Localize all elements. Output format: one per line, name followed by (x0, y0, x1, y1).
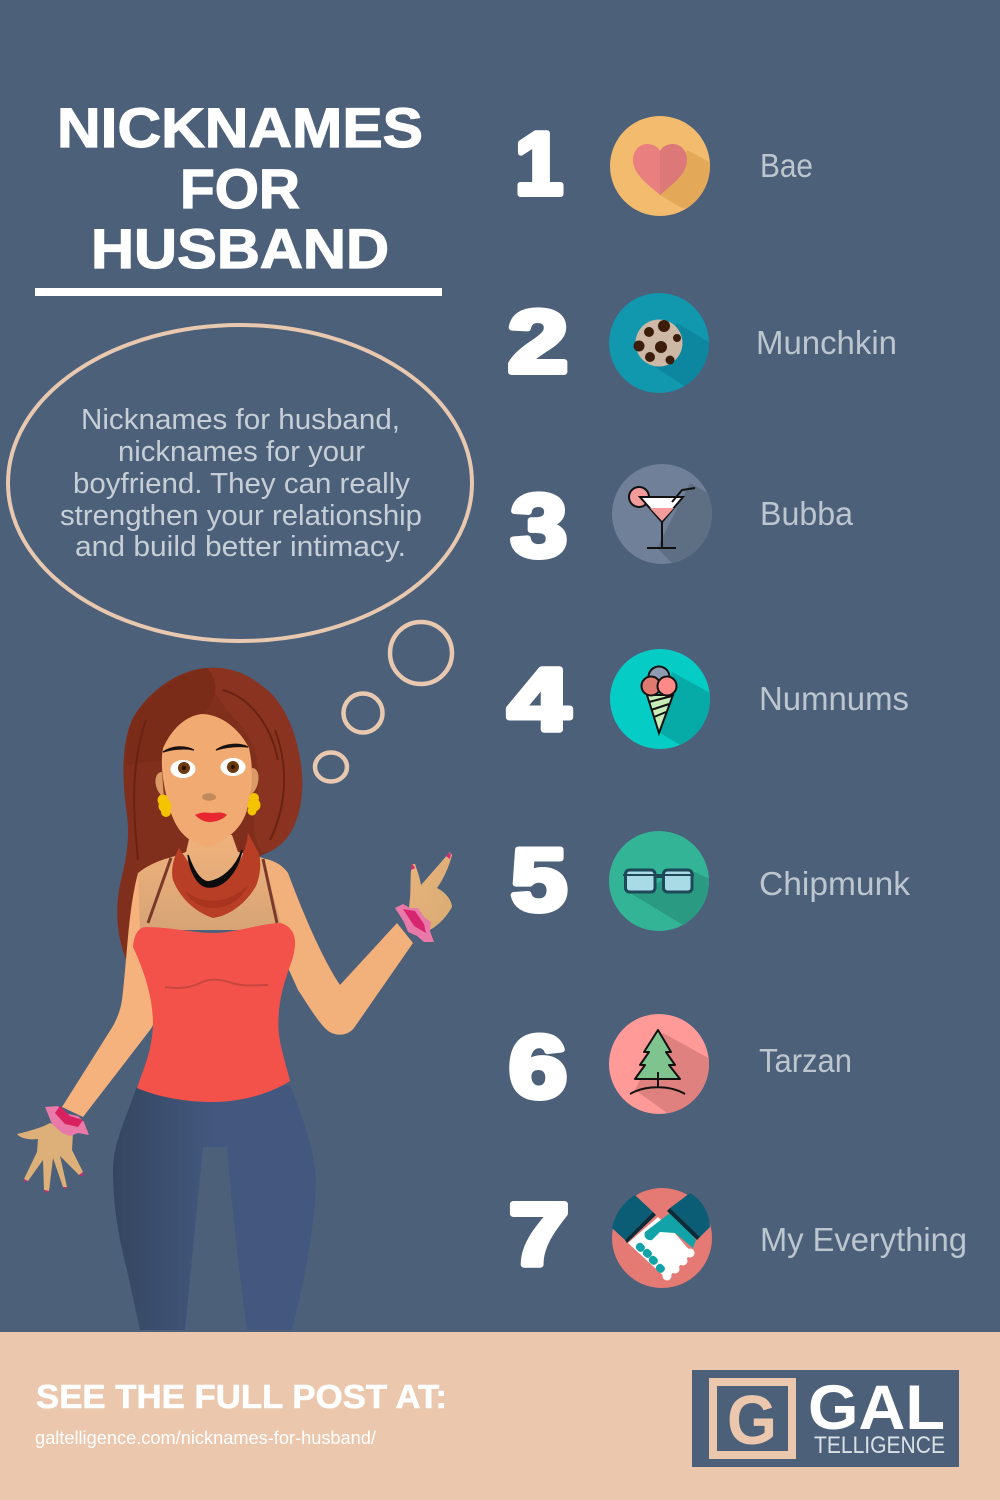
footer url: galtelligence.com/nicknames-for-husband/ (35, 1428, 376, 1448)
icon: glasses (609, 831, 712, 931)
item 6: Tarzan: 6 (509, 1017, 567, 1116)
hair back (117, 668, 302, 965)
item 1: Bae: Bae (760, 147, 813, 184)
item 1: Bae: 1 (515, 114, 563, 213)
logo: G (727, 1381, 777, 1459)
item 6: Tarzan (509, 1014, 852, 1120)
logo: TELLIGENCE (814, 1432, 945, 1459)
footer band (0, 1332, 1000, 1500)
item 2: Munchkin: 2 (508, 292, 568, 391)
item 7: My Everything (509, 1185, 967, 1288)
eyes (170, 758, 246, 778)
footer heading: SEE THE FULL POST AT: (36, 1378, 447, 1415)
thought bubble with intro text: nicknames for your (118, 436, 365, 468)
title: NICKNAMES (57, 96, 423, 159)
straps (148, 858, 277, 923)
hair right side (207, 668, 302, 852)
right hand nails (411, 852, 451, 870)
item 3: Bubba (511, 464, 854, 575)
right hand (408, 852, 452, 930)
item 5: Chipmunk: 5 (511, 830, 567, 929)
left arm (62, 873, 160, 1117)
neck and chest (138, 835, 283, 930)
thought bubble with intro text: and build better intimacy. (75, 531, 406, 563)
right scrunchie (395, 904, 434, 942)
item 4: Numnums: Numnums (759, 680, 909, 717)
nose (202, 793, 216, 801)
item 1: Bae (515, 114, 813, 220)
thought bubble with intro text: boyfriend. They can really (73, 468, 410, 500)
logo: GAL (808, 1373, 945, 1443)
item 5: Chipmunk: Chipmunk (759, 865, 910, 902)
eyebrows (163, 744, 248, 752)
face (162, 714, 252, 847)
thought bubble with intro text: strengthen your relationship (60, 500, 422, 532)
title underline (35, 288, 442, 296)
icon: ice cream (610, 649, 712, 750)
title: HUSBAND (91, 217, 389, 280)
item 6: Tarzan: Tarzan (759, 1042, 852, 1079)
hair left sweep (126, 668, 215, 765)
item 4: Numnums (508, 649, 909, 750)
icon: cookie (609, 293, 710, 400)
scarf inner shadow (188, 850, 242, 887)
icon: pine tree (609, 1014, 712, 1120)
ears (155, 768, 259, 798)
thought trail circles (315, 622, 452, 782)
item 3: Bubba: Bubba (760, 495, 854, 532)
icon: heart (610, 116, 710, 216)
item 7: My Everything: My Everything (760, 1221, 967, 1258)
item 4: Numnums: 4 (508, 650, 570, 749)
item 7: My Everything: 7 (509, 1185, 569, 1284)
thought bubble with intro text (8, 325, 472, 641)
logo (692, 1370, 959, 1467)
item 2: Munchkin (508, 292, 897, 400)
icon: cocktail (612, 464, 715, 570)
left hand (17, 1123, 83, 1191)
hair strands (134, 690, 284, 860)
woman illustration (17, 668, 452, 1330)
title: FOR (180, 157, 300, 220)
left scrunchie (45, 1106, 89, 1136)
top crease (165, 980, 268, 988)
scarf (172, 833, 260, 918)
item 2: Munchkin: Munchkin (756, 324, 897, 361)
earrings (158, 793, 260, 817)
lips (195, 812, 227, 822)
thought bubble with intro text: Nicknames for husband, (81, 404, 400, 436)
icon: handshake (612, 1188, 712, 1288)
trousers (113, 1085, 316, 1330)
item 3: Bubba: 3 (511, 476, 567, 575)
title (57, 96, 423, 280)
left hand nails (24, 1172, 83, 1193)
red top (133, 923, 295, 1102)
item 5: Chipmunk (511, 830, 910, 931)
scarf fold (185, 885, 248, 908)
right arm (262, 858, 413, 1035)
